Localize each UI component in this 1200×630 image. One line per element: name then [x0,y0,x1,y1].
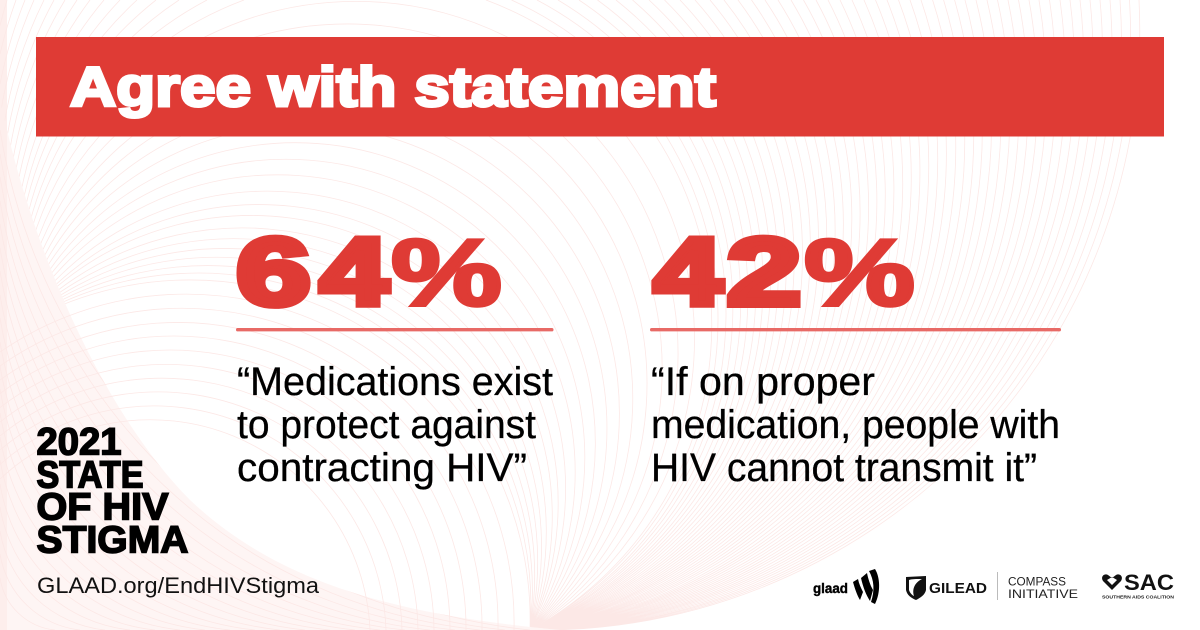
report title block: OF HIV [36,486,169,528]
number: 42%: 2 [727,220,801,326]
number: 64%: % [391,220,502,326]
logo: glaad [813,569,879,604]
number: 42%: % [804,220,915,326]
quote: medications exist: to protect against [237,403,536,447]
url: GLAAD.org/EndHIVStigma [37,573,320,598]
quote: proper medication: “If on proper [651,360,875,404]
number: 64% [236,220,502,326]
background: tinted left strip and lower-left wedge [0,0,560,630]
logo: Southern AIDS Coalition: SOUTHERN AIDS COALITION [1102,594,1175,600]
title banner [36,37,1164,136]
divider [997,572,998,600]
report title block [36,422,188,562]
logo: Gilead [906,576,987,600]
logo: glaad: glaad [813,581,848,596]
logo: Southern AIDS Coalition [1102,570,1175,600]
logo: Compass Initiative: INITIATIVE [1008,587,1078,601]
number: 64%: 6 [236,220,310,326]
rule [236,328,554,331]
number: 42% [654,220,915,326]
quote: proper medication: HIV cannot transmit it” [651,446,1037,490]
stat panel: 64 percent [236,220,554,490]
quote: medications exist [237,360,553,490]
stat panel: 42 percent [650,220,1061,490]
number: 64%: 4 [320,220,388,326]
quote: medications exist: “Medications exist [237,360,553,404]
number: 42%: 4 [654,220,722,326]
rule [650,328,1061,331]
quote: proper medication [651,360,1060,490]
logo: Southern AIDS Coalition: SAC [1124,570,1174,595]
logo: Gilead: GILEAD [929,580,987,597]
logo: Compass Initiative [1008,574,1078,601]
logo: Compass Initiative: COMPASS [1008,574,1066,588]
quote: proper medication: medication, people with [651,403,1060,447]
title text: Agree with statement [70,55,716,118]
report title block: STIGMA [36,520,188,562]
quote: medications exist: contracting HIV” [237,446,527,490]
report title block: 2021 [36,422,122,464]
report title block: STATE [36,454,144,496]
